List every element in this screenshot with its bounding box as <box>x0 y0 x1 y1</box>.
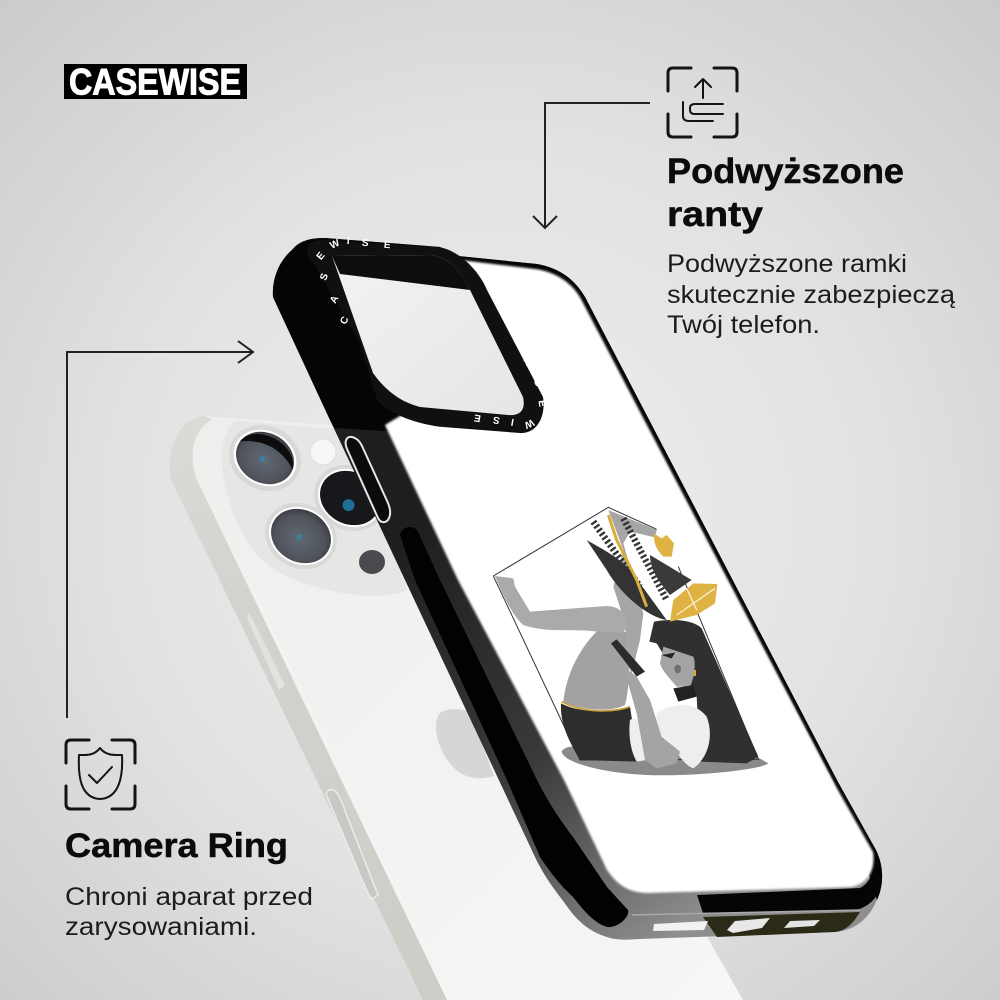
port: usb-c <box>727 918 770 933</box>
text: raised edges: skutecznie zabezpieczą <box>667 281 955 309</box>
face <box>660 647 695 687</box>
arm and leg <box>495 576 627 633</box>
ring lettering: E <box>383 240 391 251</box>
lens top <box>217 412 313 504</box>
logo box <box>64 64 247 99</box>
heading: camera ring: Camera Ring <box>65 827 288 865</box>
yellow stem <box>608 515 647 607</box>
titanium side band <box>170 416 447 1000</box>
raised leg <box>608 510 657 673</box>
arm holding phone <box>623 667 680 768</box>
shadow ellipse <box>562 747 768 775</box>
ring lettering: I <box>346 236 350 247</box>
icon: raised edges <box>668 68 737 137</box>
port: speaker right <box>784 920 820 928</box>
case: white screen <box>385 260 874 893</box>
arrow: raised edges <box>533 103 650 228</box>
case: inner black strip <box>400 527 628 927</box>
text: camera ring: zarysowaniami. <box>65 913 257 941</box>
icon: shield <box>66 740 135 809</box>
side button: action <box>247 612 285 690</box>
white top <box>657 705 710 768</box>
ring lettering: S <box>492 413 501 425</box>
back phone (iPhone) <box>170 412 743 1000</box>
ring lettering: A <box>328 294 341 306</box>
arrow: camera ring <box>67 341 253 718</box>
phone in hand <box>611 639 645 677</box>
leaves dark <box>587 540 667 620</box>
ring outer frame <box>307 240 544 433</box>
phone body <box>170 416 743 1000</box>
ring lettering: S <box>531 378 544 389</box>
torso <box>563 627 629 710</box>
case: right edge line <box>581 297 882 900</box>
ring lettering: S <box>361 238 369 249</box>
ring lettering: C <box>509 332 522 344</box>
heading: raised edges <box>667 152 904 234</box>
ring lettering: E <box>315 250 328 262</box>
earring <box>693 670 696 676</box>
ring lettering: C <box>338 315 351 327</box>
cheek <box>674 665 681 673</box>
text: raised edges <box>667 250 955 339</box>
long hair <box>649 620 758 763</box>
box outline <box>493 507 758 760</box>
ring lettering: I <box>510 416 515 427</box>
lidar sensor <box>359 550 385 574</box>
apple logo <box>436 709 494 778</box>
ring lettering: S <box>318 272 331 282</box>
yellow leaf <box>670 583 717 622</box>
case: frame <box>273 238 882 940</box>
illustration: woman in a box <box>493 507 768 775</box>
logo text: CASEWISE <box>69 62 241 102</box>
ring lettering: W <box>328 238 342 252</box>
ring lettering: E <box>535 399 548 408</box>
text: raised edges: Podwyższone ramki <box>667 250 907 278</box>
heading: raised edges: Podwyższone <box>667 152 904 191</box>
camera bump <box>222 421 408 596</box>
yellow flower <box>654 533 674 557</box>
lens right <box>302 452 398 544</box>
eye <box>662 653 675 658</box>
camera ring <box>307 236 548 433</box>
ring lettering <box>315 236 548 430</box>
side button: volume <box>326 790 378 899</box>
text: camera ring: Chroni aparat przed <box>65 883 313 911</box>
heading: raised edges: ranty <box>667 195 764 234</box>
volume button on case <box>346 437 390 522</box>
case: thin highlight <box>632 910 860 915</box>
ring lettering: E <box>473 411 482 423</box>
port: speaker left <box>653 921 708 931</box>
waistline <box>562 702 630 711</box>
lens bottom <box>253 490 349 582</box>
ring opening shadow <box>332 255 470 290</box>
ring lettering: A <box>521 356 534 368</box>
logo <box>64 62 247 102</box>
case: black top section <box>273 238 600 432</box>
ring opening <box>332 255 524 415</box>
text: raised edges: Twój telefon. <box>667 311 820 339</box>
ring lettering: W <box>522 416 536 430</box>
neck <box>673 685 697 702</box>
highlight line on the band <box>250 584 450 1000</box>
text: camera ring <box>65 883 313 941</box>
case: bottom black band <box>697 868 882 913</box>
flash <box>310 439 336 465</box>
case: olive lower strip <box>703 912 860 937</box>
shorts <box>561 703 638 762</box>
